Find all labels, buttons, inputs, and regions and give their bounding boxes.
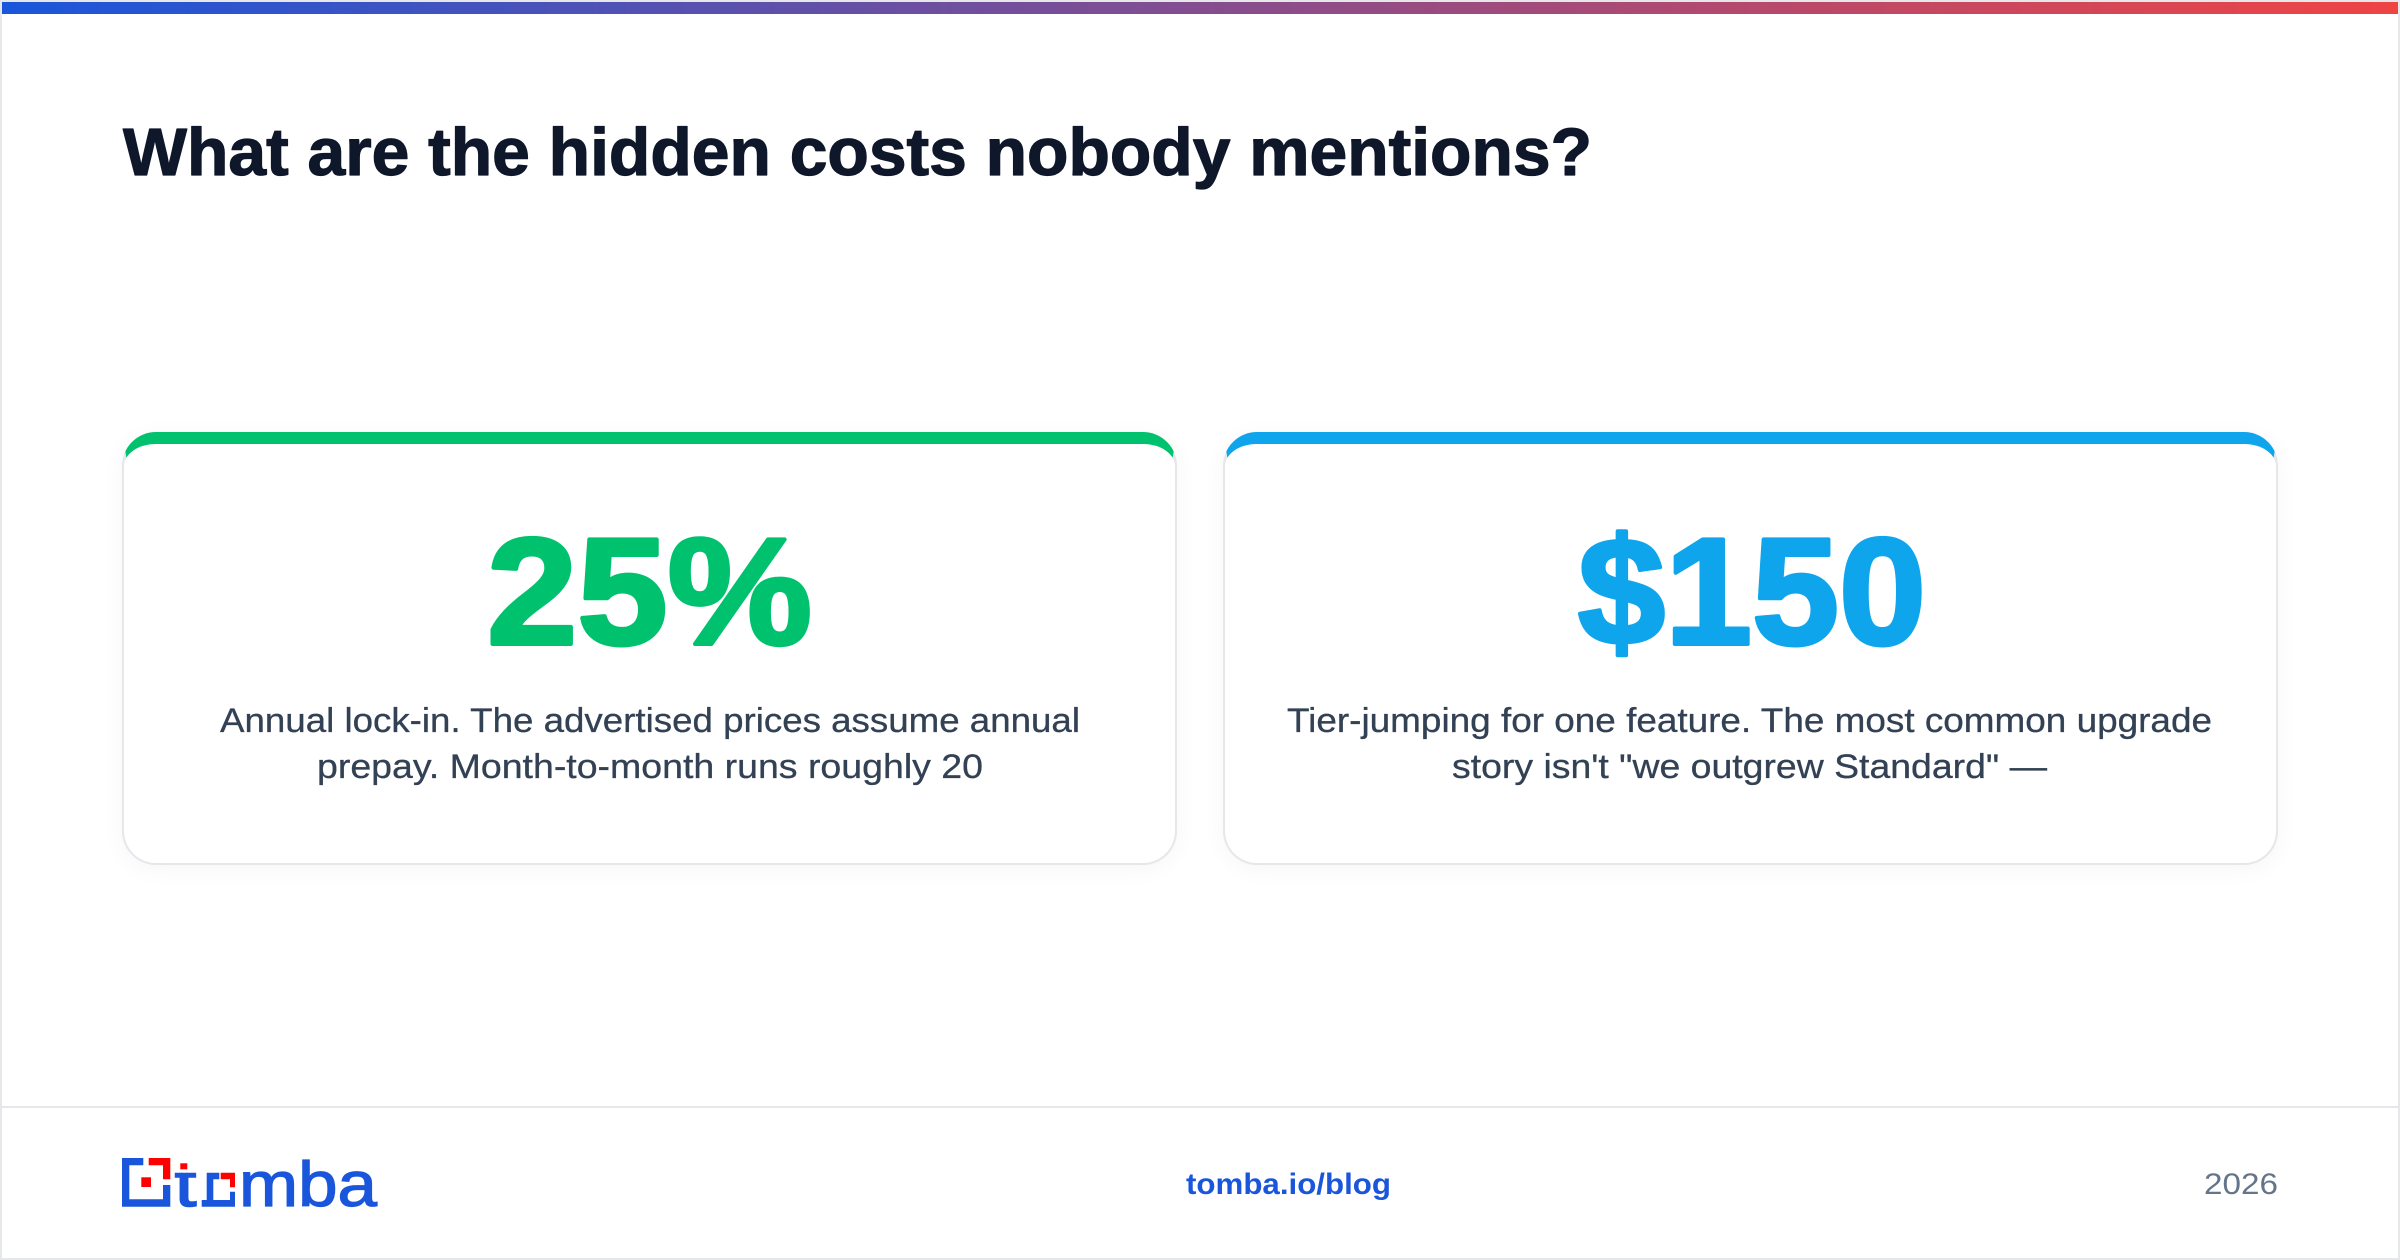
panel: tier-jumping card [1223,432,2278,865]
icon: red dot of t [180,1163,187,1169]
text: annual lock-in description: prepay. Month-to-month runs roughly 20 [317,748,983,786]
text: t: t [174,1151,196,1220]
stat: 25%: 25% [487,507,812,677]
icon: square o [202,1173,235,1207]
icon: logo mark [122,1158,170,1207]
top gradient bar [2,2,2398,14]
logo: tomba [122,1158,378,1208]
text: annual lock-in description [220,702,1080,786]
text: tier-jumping description [1287,702,2212,786]
text: mba: mba [239,1150,378,1220]
text: tier-jumping description: Tier-jumping for one feature. The most common upgrade [1287,702,2212,740]
panel: annual lock-in card [122,432,1177,865]
text: annual lock-in description: Annual lock-in. The advertised prices assume annual [220,702,1080,740]
stat: $150: $150 [1578,507,1926,677]
footer link: tomba.io/blog [1186,1168,1391,1201]
title: What are the hidden costs nobody mentions? [123,115,1592,190]
text: tier-jumping description: story isn't "we outgrew Standard" — [1452,748,2047,786]
footer year: 2026 [2204,1168,2278,1201]
